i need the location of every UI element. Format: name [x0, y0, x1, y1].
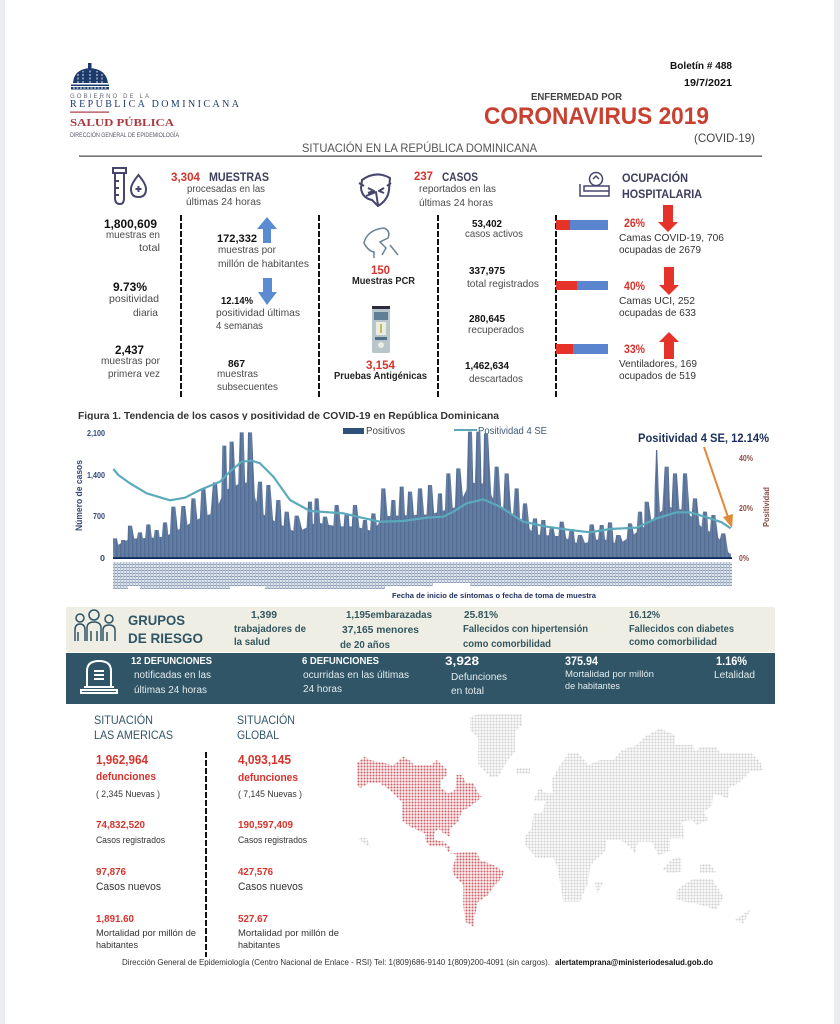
y axis labels: positivity: 20%: [739, 504, 753, 513]
y axis labels: positivity: [739, 454, 753, 563]
callout: positividad: Positividad 4 SE, 12.14%: [638, 431, 769, 445]
stat: total defunciones: 3,928: [445, 654, 479, 668]
stat: letalidad: Letalidad: [714, 670, 755, 681]
stat: 26%: 26%: [624, 216, 645, 230]
panel: situación global: [237, 712, 339, 951]
text: ventiladores: [619, 358, 697, 382]
text: camas covid: ocupadas de 2679: [619, 244, 701, 256]
progress bar: ventiladores: [556, 344, 608, 354]
panel: situación las américas: [94, 712, 196, 951]
stat: activos: [465, 219, 523, 240]
text: procesadas: [186, 183, 265, 208]
text: procesadas: últimas 24 horas: [186, 196, 261, 208]
heading: ocupación hospitalaria: OCUPACIÓN: [622, 170, 688, 185]
icon: hospital bed: [580, 172, 609, 196]
stat: 6 defunciones: ocurridas en las últimas: [303, 670, 409, 681]
heading: global: GLOBAL: [237, 728, 279, 742]
stat: embarazadas y menores: 37,165 menores: [342, 625, 419, 636]
heading: grupos de riesgo: GRUPOS: [128, 612, 185, 628]
map: americas highlighted: [357, 757, 504, 927]
y axis labels: cases: [87, 429, 106, 563]
stat: casos américas: 74,832,520: [96, 820, 145, 831]
stat: defunciones américas: 1,962,964: [96, 753, 148, 767]
stat: 33%: 33%: [624, 342, 645, 356]
stat: registrados: 337,975: [469, 266, 505, 277]
stat: pcr: Muestras PCR: [352, 276, 416, 287]
stat: defunciones global: 4,093,145: [238, 753, 291, 767]
legend: positivos: [343, 426, 405, 437]
stat: activos: casos activos: [465, 228, 523, 240]
stat: subsecuentes: muestras: [217, 368, 258, 380]
stat: por millón: [217, 233, 309, 270]
stat: 40%: 40%: [624, 279, 645, 293]
stat: mortalidad américas: habitantes: [96, 940, 138, 951]
stat: positividad 4 semanas: positividad últimas: [216, 307, 300, 319]
stat: 6 defunciones: 6 DEFUNCIONES: [302, 656, 379, 667]
stat: total defunciones: Defunciones: [451, 672, 507, 683]
stat: descartados: 1,462,634: [465, 361, 509, 372]
header: bulletin number and date: [670, 60, 732, 89]
arrow: down red: [659, 267, 679, 295]
stat: antigénicas: Pruebas Antigénicas: [334, 371, 427, 382]
icon: antigen test cassette: [372, 306, 390, 353]
stat: 12 defunciones: 12 DEFUNCIONES: [131, 656, 212, 667]
text: ventiladores: ocupados de 519: [619, 370, 696, 382]
stat: casos global: Casos registrados: [238, 835, 307, 846]
stat: defunciones américas: defunciones: [96, 771, 156, 783]
stat: recuperados: 280,645: [469, 314, 505, 325]
progress bar: camas covid: [556, 220, 608, 230]
stat: subsecuentes: [217, 359, 278, 393]
stat: positividad 4 semanas: 4 semanas: [216, 320, 263, 332]
icon: dome: [71, 63, 109, 90]
stat: antigénicas: [334, 358, 427, 382]
icon: masked face: [359, 174, 391, 206]
text: dirección general: DIRECCIÓN GENERAL DE EPIDEMIOLOGÍA: [70, 132, 179, 139]
x axis title: Fecha de inicio de síntomas o fecha de toma de muestra: [392, 591, 597, 600]
stat: diabetes: Fallecidos con diabetes: [629, 624, 734, 635]
legend: positivos: Positivos: [366, 426, 405, 437]
stat: mortalidad américas: 1,891.60: [96, 914, 134, 925]
heading: 237 casos: [414, 169, 478, 184]
stat: total: total: [139, 242, 160, 254]
text: reportados: [419, 183, 496, 209]
stat: nuevos global: Casos nuevos: [238, 881, 303, 893]
bars: positive cases: [113, 432, 731, 558]
stat: embarazadas y menores: de 20 años: [340, 640, 390, 651]
panel: casos: [334, 169, 539, 385]
header: title: ENFERMEDAD POR: [531, 92, 623, 103]
stat: casos global: [238, 820, 307, 846]
heading: global: [237, 712, 295, 742]
heading: ocupación hospitalaria: HOSPITALARIA: [622, 187, 702, 201]
stat: letalidad: [714, 654, 755, 681]
heading: 237 casos: 237: [414, 169, 433, 183]
stat: embarazadas y menores: [340, 610, 432, 651]
stat: nuevos américas: Casos nuevos: [96, 881, 161, 893]
text: camas uci: ocupadas de 633: [619, 307, 696, 319]
stat: trabajadores de la salud: 1,399: [251, 610, 277, 621]
y axis title: cases: Número de casos: [74, 460, 84, 531]
heading: 237 casos: CASOS: [442, 170, 478, 184]
stat: mortalidad américas: Mortalidad por millón de: [96, 928, 196, 939]
x axis: date labels: [113, 562, 732, 589]
stat: positividad diaria: [109, 280, 159, 319]
header: logo: [70, 63, 240, 139]
stat: nuevos américas: 97,876: [96, 867, 126, 878]
heading: global: SITUACIÓN: [237, 712, 295, 727]
footer: Dirección General de Epidemiología (Centro Nacional de Enlace - RSI) Tel: 1(809)686-9140 1(809)200-4091 (sin cargos).: [122, 958, 550, 967]
stat: recuperados: [468, 314, 524, 336]
stat: 6 defunciones: [302, 656, 409, 695]
stat: hipertensión: Fallecidos con hipertensión: [463, 624, 588, 635]
chart title: Figura 1. Tendencia de los casos y positividad de COVID-19 en República Dominicana: [78, 410, 499, 422]
arrow: orange callout: [704, 447, 733, 528]
heading: 3,304 muestras: MUESTRAS: [209, 170, 269, 184]
stat: antigénicas: 3,154: [366, 358, 395, 372]
stat: positividad diaria: positividad: [109, 293, 159, 305]
stat: pcr: 150: [371, 263, 390, 277]
stat: mortalidad: [565, 654, 654, 691]
stat: mortalidad: Mortalidad por millón: [565, 669, 654, 679]
arrow: down red: [658, 205, 678, 232]
text: camas uci: [619, 295, 696, 319]
stat: total defunciones: [445, 654, 507, 697]
heading: las américas: SITUACIÓN: [94, 712, 153, 727]
stat: mortalidad: de habitantes: [565, 681, 621, 691]
header: title: [484, 92, 755, 145]
heading: 3,304 muestras: [171, 170, 269, 184]
panel: grupos de riesgo: [66, 607, 775, 652]
stat: mortalidad global: 527.67: [238, 914, 268, 925]
stat: mortalidad: 375.94: [565, 654, 598, 668]
y axis labels: cases: 0: [100, 554, 106, 563]
dashed dividers: [181, 215, 556, 957]
text: reportados: reportados en las: [419, 183, 496, 195]
heading: las américas: LAS AMERICAS: [94, 728, 173, 742]
icon: nasal swab: [364, 228, 398, 258]
header: bulletin number and date: 19/7/2021: [684, 77, 732, 89]
header: title: (COVID-19): [694, 131, 755, 145]
stat: por millón: muestras por: [218, 244, 276, 256]
y axis labels: cases: 700: [93, 512, 105, 521]
text: ventiladores: Ventiladores, 169: [619, 358, 697, 370]
stat: primera vez: muestras por: [101, 355, 160, 367]
y axis title: positivity: Positividad: [762, 487, 771, 527]
stat: subsecuentes: subsecuentes: [217, 381, 278, 393]
panel: chart: [74, 410, 771, 600]
text: camas covid: [619, 232, 724, 256]
y axis labels: positivity: 0%: [739, 554, 749, 563]
stat: total: 1,800,609: [104, 217, 157, 231]
text: república dominicana: REPÚBLICA DOMINICANA: [70, 98, 240, 110]
header: title: CORONAVIRUS 2019: [484, 103, 709, 130]
header: bulletin number and date: Boletín # 488: [670, 60, 732, 72]
stat: positividad 4 semanas: 12.14%: [221, 295, 254, 307]
stat: 12 defunciones: notificadas en las: [134, 670, 211, 681]
stat: nuevos global: [238, 867, 303, 893]
arrow: up red: [659, 332, 679, 359]
arrow: down blue: [258, 278, 277, 305]
stat: defunciones américas: [96, 753, 160, 799]
panel: ocupación hospitalaria: [556, 170, 724, 382]
text: procesadas: procesadas en las: [187, 183, 265, 195]
stat: 6 defunciones: 24 horas: [303, 684, 342, 695]
line: positividad 4 SE: [113, 461, 731, 532]
stat: diabetes: como comorbilidad: [629, 637, 717, 648]
stat: pcr: [352, 263, 416, 287]
text: camas covid: Camas COVID-19, 706: [619, 232, 724, 244]
stat: trabajadores de la salud: [234, 610, 306, 648]
stat: hipertensión: 25.81%: [464, 610, 498, 621]
arrow: up blue: [257, 217, 277, 243]
stat: registrados: [467, 266, 539, 290]
stat: por millón: 172,332: [217, 233, 257, 245]
stat: mortalidad américas: [96, 914, 196, 951]
y axis labels: cases: 2,100: [87, 429, 105, 438]
map: rest of the world: [358, 713, 763, 923]
stat: defunciones global: [238, 753, 302, 799]
icon: drop: [131, 175, 146, 197]
stat: defunciones global: ( 7,145 Nuevas ): [238, 789, 302, 799]
heading: situación en la república: SITUACIÓN EN LA REPÚBLICA DOMINICANA: [302, 140, 537, 155]
stat: total defunciones: en total: [451, 686, 484, 697]
stat: defunciones global: defunciones: [238, 772, 298, 784]
stat: mortalidad global: habitantes: [238, 940, 280, 951]
stat: descartados: descartados: [469, 373, 523, 385]
stat: hipertensión: como comorbilidad: [463, 639, 551, 650]
stat: recuperados: recuperados: [468, 324, 524, 336]
stat: trabajadores de la salud: trabajadores de: [234, 624, 306, 635]
stat: positividad diaria: 9.73%: [113, 280, 147, 294]
heading: grupos de riesgo: [128, 612, 203, 646]
stat: hipertensión: [463, 610, 588, 650]
stat: registrados: total registrados: [467, 278, 539, 290]
stat: embarazadas y menores: 1,195embarazadas: [346, 610, 432, 621]
stat: activos: 53,402: [472, 219, 502, 230]
stat: defunciones américas: ( 2,345 Nuevas ): [96, 789, 160, 799]
text: gobierno: GOBIERNO DE LA: [70, 94, 149, 100]
stat: 12 defunciones: últimas 24 horas: [134, 685, 207, 696]
dotted world map: [357, 713, 763, 927]
stat: diabetes: [629, 610, 734, 648]
stat: nuevos américas: [96, 867, 161, 893]
legend: positividad line: Positividad 4 SE: [478, 426, 547, 437]
stat: casos américas: [96, 820, 165, 846]
panel: defunciones: [66, 653, 775, 704]
stat: subsecuentes: 867: [228, 359, 245, 370]
stat: diabetes: 16.12%: [629, 610, 660, 621]
stat: mortalidad global: [238, 914, 339, 951]
stat: casos global: 190,597,409: [238, 820, 293, 831]
text: reportados: últimas 24 horas: [419, 197, 493, 209]
heading: grupos de riesgo: DE RIESGO: [128, 630, 203, 646]
stat: mortalidad global: Mortalidad por millón de: [238, 928, 339, 939]
stat: letalidad: 1.16%: [716, 654, 747, 668]
stat: casos américas: Casos registrados: [96, 835, 165, 846]
stat: positividad diaria: diaria: [133, 307, 158, 319]
footer: alertatemprana@ministeriodesalud.gob.do: [555, 958, 713, 967]
text: salud pública: SALUD PÚBLICA: [70, 117, 174, 129]
y axis labels: positivity: 40%: [739, 454, 753, 463]
icon: tombstone: [81, 661, 117, 693]
stat: trabajadores de la salud: la salud: [234, 637, 270, 648]
stat: primera vez: primera vez: [108, 368, 160, 380]
heading: las américas: [94, 712, 173, 742]
panel: muestras: [101, 168, 309, 393]
stat: primera vez: [101, 343, 160, 380]
stat: descartados: [465, 361, 523, 385]
stat: por millón: millón de habitantes: [218, 258, 309, 270]
y axis labels: cases: 1,400: [87, 471, 105, 480]
heading: 3,304 muestras: 3,304: [171, 170, 200, 184]
heading: ocupación hospitalaria: [622, 170, 702, 201]
stat: total: muestras en: [106, 229, 160, 241]
stat: primera vez: 2,437: [115, 343, 144, 357]
text: camas uci: Camas UCI, 252: [619, 295, 695, 307]
icon: people: [75, 610, 115, 641]
stat: positividad 4 semanas: [216, 295, 300, 332]
progress bar: camas uci: [556, 281, 608, 290]
icon: test tube: [113, 168, 126, 204]
stat: total: [104, 217, 160, 254]
stat: nuevos global: 427,576: [238, 867, 273, 878]
stat: 12 defunciones: [131, 656, 212, 696]
